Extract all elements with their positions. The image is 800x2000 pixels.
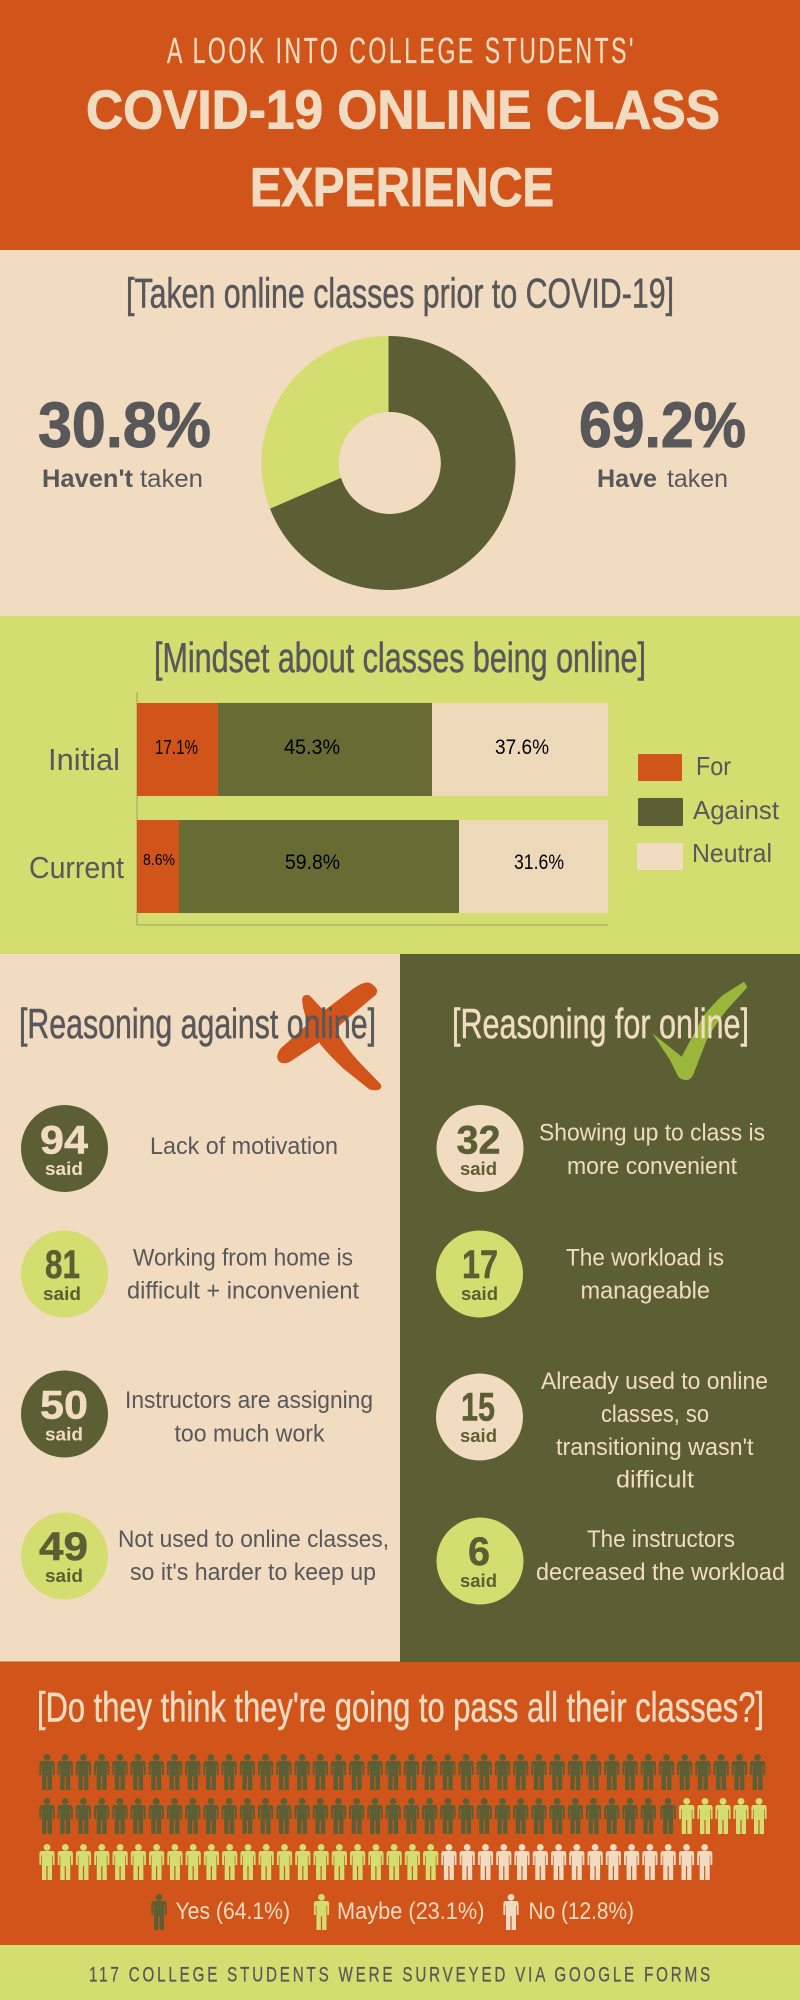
bar: current: 59.8% [285,851,340,874]
reason: 94 said [21,1105,338,1192]
bar: initial: 37.6% [495,736,549,759]
title line 2: EXPERIENCE [250,156,554,218]
stat: 69.2 percent have taken [579,389,746,493]
reason: 49 said: so it's harder to keep up [130,1559,376,1586]
bar: initial [137,703,608,796]
reason: 17 said: 17 [462,1243,498,1287]
pictogram row 2 [39,1798,767,1834]
reason: 15 said: 15 [461,1386,495,1430]
panel: mindset about classes being online [0,616,800,954]
panel: footer [0,1945,800,2000]
stacked bar chart [29,692,608,925]
heading: [Reasoning against online] [19,1000,376,1047]
reason: 81 said: difficult + inconvenient [127,1278,359,1304]
reason: 81 said: 81 [45,1243,80,1287]
panel: reasoning against online [0,954,400,1662]
bar: current [137,820,608,913]
stat: 69.2 percent have taken: Have [597,465,657,493]
reason: 15 said: transitioning wasn't [556,1434,754,1461]
donut chart [262,336,516,590]
reason: 15 said: difficult [616,1466,694,1494]
reason: 50 said: said [45,1424,83,1444]
reason: 49 said: 49 [39,1525,88,1569]
reason: 81 said: Working from home is [133,1244,353,1272]
reason: 17 said: The workload is [566,1244,724,1272]
reason: 49 said: Not used to online classes, [118,1526,389,1553]
axis label: current: Current [29,850,124,885]
reason: 6 said: The instructors [587,1526,735,1553]
reason: 32 said: 32 [456,1118,500,1162]
panel: reasoning for online [400,954,800,1662]
bar: initial: 17.1% [155,737,198,759]
reason: 81 said: said [43,1284,81,1304]
reason: 32 said [436,1105,765,1192]
panel: taken online classes prior to COVID-19 [0,250,800,616]
reason: 32 said: more convenient [567,1153,737,1180]
bar: current: 31.6% [514,851,564,874]
panel: title banner [0,0,800,250]
icon: green check mark [652,982,747,1080]
reason: 6 said: 6 [468,1530,490,1574]
reason: 6 said: decreased the workload [536,1559,785,1586]
legend [637,751,780,870]
bar: initial: 45.3% [284,736,340,759]
stat: 30.8 percent haven't taken: taken [140,465,203,493]
reason: 17 said: said [461,1284,498,1304]
reason: 32 said: Showing up to class is [539,1120,765,1146]
reason: 50 said [21,1370,373,1458]
reason: 15 said [436,1368,768,1494]
icon: red X [279,984,380,1089]
stat: 30.8 percent haven't taken [38,389,211,493]
reason: 15 said: said [460,1426,497,1446]
title line 1: COVID-19 ONLINE CLASS [86,78,720,140]
reason: 15 said: classes, so [601,1401,709,1428]
reason: 50 said: too much work [174,1420,325,1448]
legend: Maybe (23.1%) [337,1898,484,1925]
legend: Against [693,795,780,825]
reason: 50 said: Instructors are assigning [125,1387,373,1414]
legend: No (12.8%) [528,1898,634,1925]
legend [151,1894,634,1930]
reason: 15 said: Already used to online [541,1368,768,1395]
reason: 17 said [436,1230,724,1318]
legend: Neutral [692,838,772,868]
axis label: initial: Initial [48,742,120,777]
legend: Yes (64.1%) [176,1898,290,1925]
panel: do they think they will pass [0,1661,800,1945]
reason: 32 said: said [460,1159,497,1179]
stat: 69.2 percent have taken: 69.2% [579,389,746,461]
pictogram row 3 [39,1844,712,1880]
legend: For [696,751,731,781]
pictogram row 1 [39,1754,765,1790]
stat: 69.2 percent have taken: taken [667,465,728,493]
reason: 17 said: manageable [580,1278,710,1304]
stat: 30.8 percent haven't taken: 30.8% [38,389,211,461]
stat: 30.8 percent haven't taken: Haven't [42,465,134,493]
reason: 6 said: said [460,1571,497,1591]
reason: 81 said [21,1230,359,1318]
reason: 6 said [436,1518,785,1604]
reason: 49 said [21,1512,389,1600]
reason: 94 said: 94 [40,1118,89,1162]
reason: 94 said: said [45,1159,83,1179]
bar: current: 8.6% [143,852,175,869]
reason: 50 said: 50 [40,1384,88,1428]
reason: 94 said: Lack of motivation [150,1133,338,1160]
reason: 49 said: said [45,1566,83,1586]
